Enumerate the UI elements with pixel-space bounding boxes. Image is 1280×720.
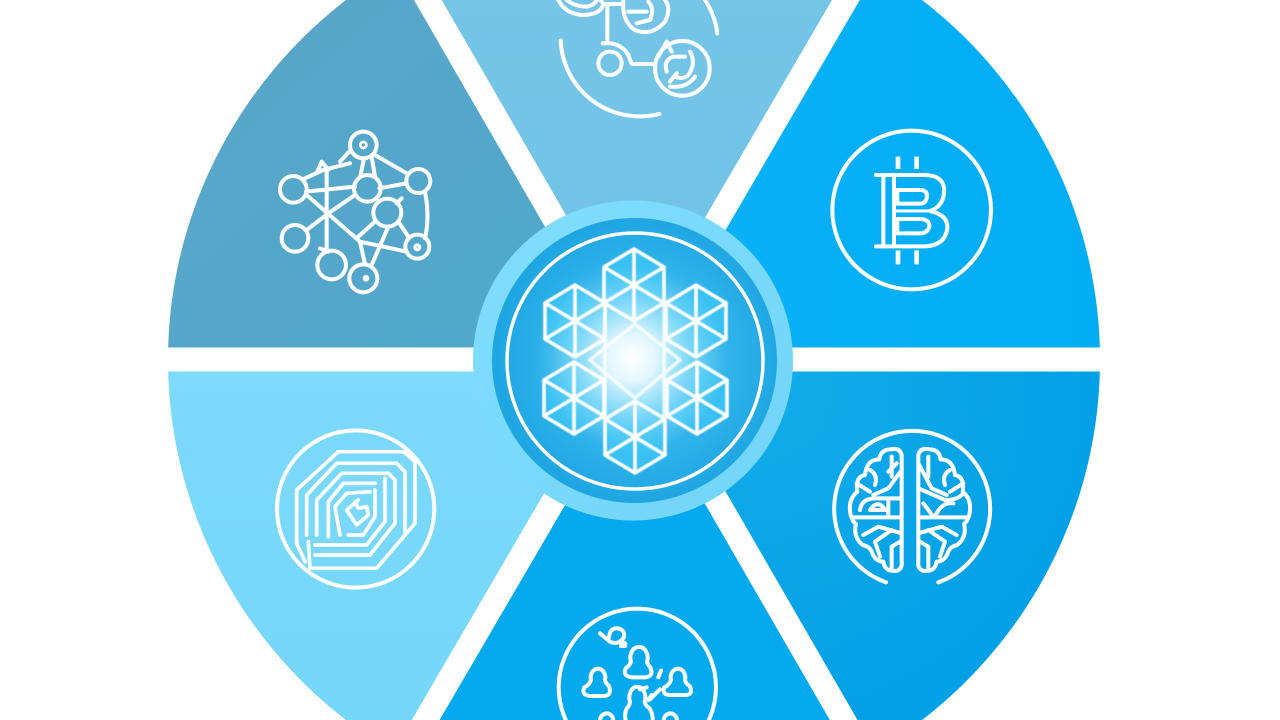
segment: lower right bbox=[725, 372, 1100, 720]
right hemisphere bbox=[918, 449, 970, 571]
cube fills bbox=[544, 249, 727, 473]
wheel segments bbox=[160, 0, 1110, 720]
person: top center bbox=[625, 647, 652, 677]
icon: bitcoin bbox=[832, 131, 991, 289]
segment: upper right bbox=[726, 0, 1100, 348]
small people cut by the edge bbox=[600, 713, 677, 720]
icon: circuit maze (lower left) bbox=[277, 430, 434, 588]
person: lower center bbox=[625, 687, 653, 720]
segment: bottom bbox=[440, 504, 830, 720]
person: right bbox=[664, 669, 691, 695]
segment: top bbox=[442, 0, 832, 218]
segment: upper left bbox=[168, 0, 545, 348]
center hub bbox=[473, 200, 793, 520]
icon: people group (bottom) bbox=[559, 609, 716, 720]
hub white circle bbox=[507, 233, 763, 489]
cube: center bbox=[590, 305, 680, 415]
icon: blockchain cubes bbox=[544, 249, 727, 473]
hub glow bbox=[537, 263, 727, 453]
infographic wheel bbox=[168, 0, 1100, 720]
icon: network nodes (upper left) bbox=[280, 132, 430, 292]
white gaps between segments bbox=[150, 0, 1120, 720]
hub inner disc bbox=[492, 218, 777, 503]
icon: scooter (top, cropped) bbox=[558, 0, 717, 116]
cube: lower left bbox=[544, 362, 604, 434]
cube: upper right bbox=[666, 285, 726, 357]
cube: lower right bbox=[667, 362, 727, 434]
hub outer ring bbox=[473, 200, 793, 520]
icon: brain bbox=[834, 431, 990, 582]
cube: top bbox=[604, 249, 664, 321]
left hemisphere bbox=[850, 449, 902, 571]
cube: upper left bbox=[545, 285, 605, 357]
person: left bbox=[583, 669, 610, 696]
segment: lower left bbox=[168, 372, 544, 720]
cube: bottom bbox=[605, 401, 665, 473]
